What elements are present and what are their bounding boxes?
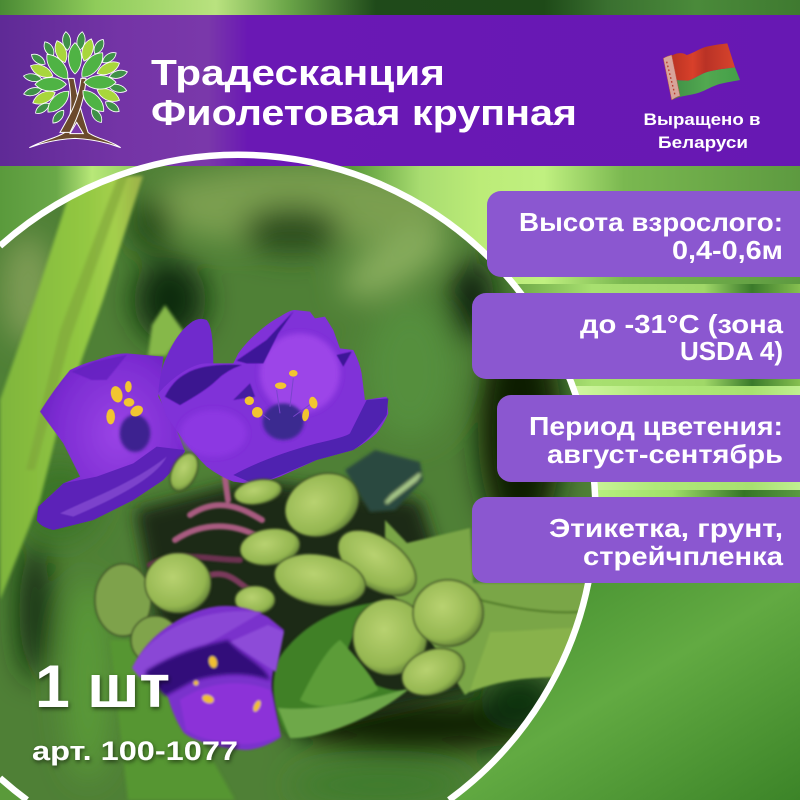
photo background foliage bbox=[2, 165, 562, 800]
title bbox=[151, 52, 577, 133]
panel: frost hardiness: до -31°С (зона bbox=[580, 309, 784, 339]
panel: frost hardiness: USDA 4) bbox=[680, 336, 783, 366]
panel: flowering period: Период цветения: bbox=[529, 411, 783, 441]
flowers upper pair bbox=[37, 310, 388, 530]
text: grown in Belarus bbox=[644, 111, 760, 152]
panel: package contents bbox=[472, 497, 800, 583]
panel: height: Высота взрослого: bbox=[519, 207, 783, 237]
icon: Belarus flag bbox=[663, 43, 740, 100]
pink stems bbox=[150, 478, 262, 590]
foliage bbox=[23, 31, 128, 125]
panel: package contents: Этикетка, грунт, bbox=[549, 513, 783, 543]
quantity label: 1 шт bbox=[35, 653, 170, 720]
large green leaves bbox=[273, 520, 590, 738]
trunk and roots bbox=[29, 78, 121, 148]
header banner bbox=[0, 15, 800, 166]
flower: large center bbox=[158, 310, 388, 485]
icon: tree logo bbox=[23, 31, 128, 148]
panel: flowering period bbox=[497, 395, 800, 482]
panel: height bbox=[487, 191, 800, 277]
panel: package contents: стрейчпленка bbox=[583, 541, 784, 571]
title: Традесканция bbox=[151, 52, 445, 93]
text: grown in Belarus: Беларуси bbox=[658, 134, 748, 152]
flower: lower bbox=[132, 606, 284, 750]
buds bbox=[95, 449, 483, 704]
yellow stamens bbox=[106, 370, 319, 424]
article number: арт. 100-1077 bbox=[32, 736, 238, 766]
white circle ring bbox=[0, 155, 595, 800]
panel: flowering period: август-сентябрь bbox=[547, 439, 783, 469]
title: Фиолетовая крупная bbox=[151, 92, 577, 133]
photo background base bbox=[0, 150, 600, 800]
flower: left bbox=[37, 353, 185, 530]
text: grown in Belarus: Выращено в bbox=[644, 111, 760, 129]
shadow behind buds bbox=[135, 480, 480, 730]
panel: frost hardiness bbox=[472, 293, 800, 379]
panel: height: 0,4-0,6м bbox=[672, 235, 783, 265]
flower: rear petal bbox=[158, 319, 213, 393]
leaf blades bbox=[0, 176, 423, 800]
photo: purple tradescantia flowers in circle bbox=[0, 150, 600, 800]
